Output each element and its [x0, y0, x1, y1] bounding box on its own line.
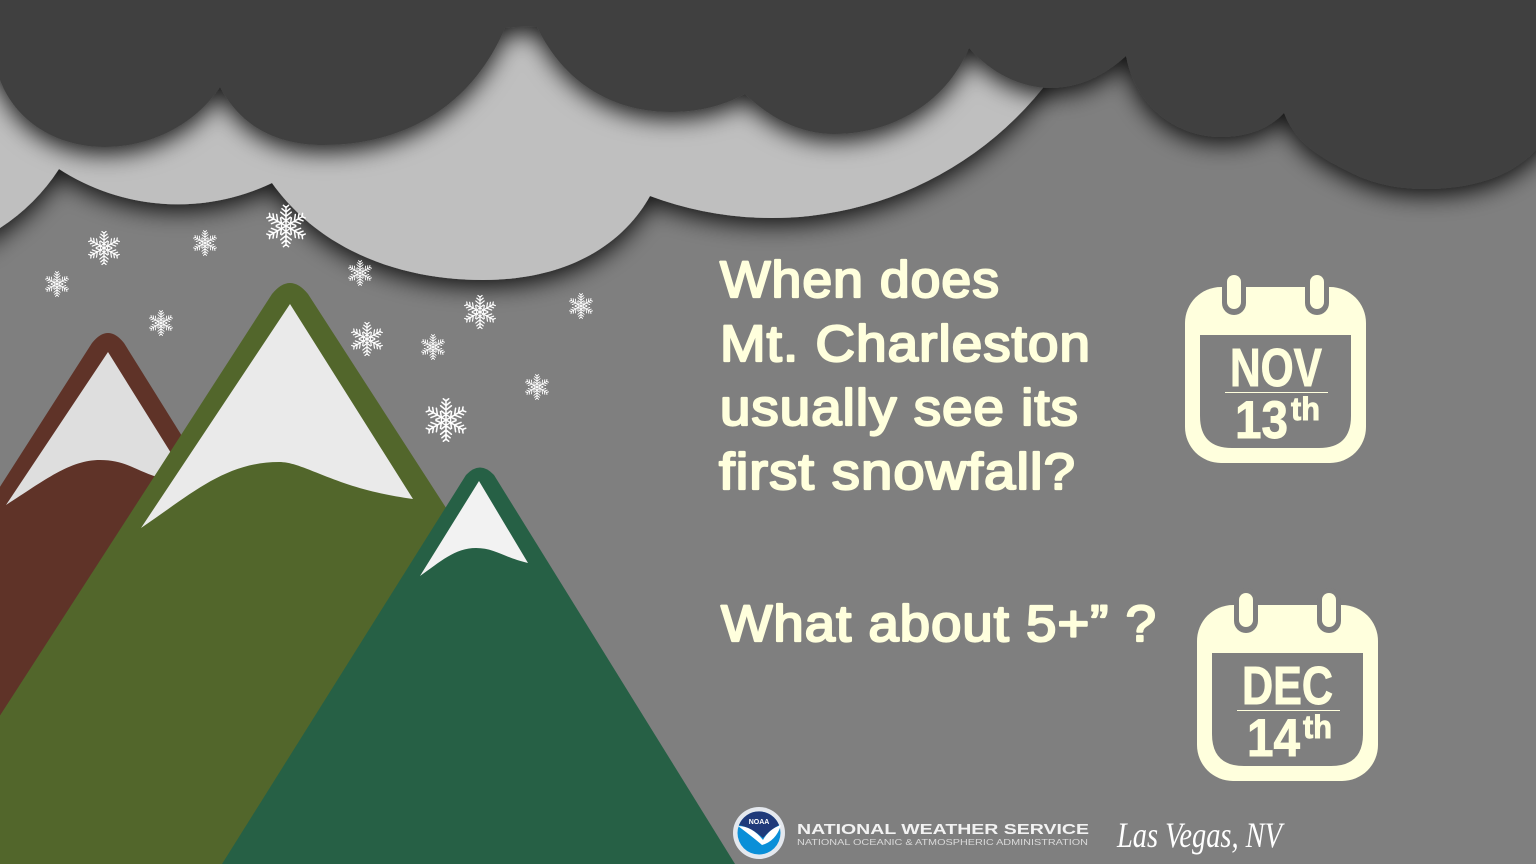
calendar: Nov 13th: th [1291, 391, 1320, 427]
dark cloud [0, 0, 1536, 189]
calendar: Dec 14th: DEC [1242, 656, 1333, 716]
calendar: Dec 14th: 14 [1247, 709, 1300, 768]
National Weather Service wordmark [797, 821, 1089, 847]
question 1: usually see its [720, 379, 1079, 436]
mountain: brown [0, 333, 200, 760]
question 1: When does [720, 251, 1000, 308]
calendar: Nov 13th [1185, 270, 1366, 463]
snowflakes [45, 205, 593, 441]
calendar: Dec 14th [1197, 588, 1378, 781]
National Weather Service wordmark: NATIONAL WEATHER SERVICE [797, 821, 1089, 838]
light cloud [0, 0, 1043, 280]
National Weather Service wordmark: NATIONAL OCEANIC & ATMOSPHERIC ADMINISTRATION [797, 837, 1088, 847]
calendar: Nov 13th: 13 [1235, 391, 1288, 450]
question 1: Mt. Charleston [720, 315, 1091, 372]
icon: NOAA logo: NOAA [749, 819, 769, 826]
question 1: first snowfall? [719, 443, 1076, 500]
mountain: green [222, 468, 735, 864]
question 1 [719, 251, 1091, 500]
question 2: What about 5+” ? [721, 595, 1157, 652]
calendar: Nov 13th: NOV [1230, 338, 1322, 398]
location: Las Vegas, NV: Las Vegas, NV [1116, 815, 1285, 855]
icon: NOAA logo [733, 807, 785, 859]
mountain: olive [0, 283, 470, 864]
calendar: Dec 14th: th [1303, 709, 1332, 745]
